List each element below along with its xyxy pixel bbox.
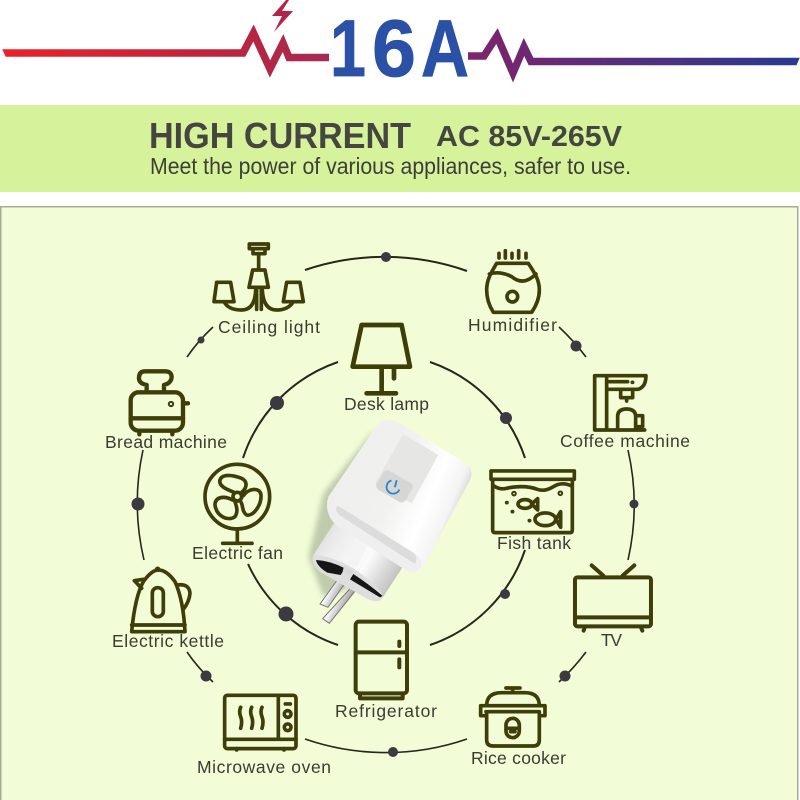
power line left <box>2 33 329 69</box>
label: electric kettle: Electric kettle <box>112 631 224 651</box>
inner ring dots <box>270 396 512 622</box>
label: fish tank: Fish tank <box>497 533 571 553</box>
icon: toaster <box>131 371 188 434</box>
smart plug <box>308 420 471 623</box>
plug earth clip <box>345 527 373 567</box>
icon: electric kettle <box>132 568 190 632</box>
banner subtitle: Meet the power of various appliances, safer to use. <box>150 153 631 179</box>
header: 16A power line <box>0 0 800 94</box>
icon: desk lamp <box>353 325 410 393</box>
voltage range: AC 85V-265V <box>436 121 623 153</box>
icon: rice cooker <box>481 688 545 746</box>
label: coffee machine: Coffee machine <box>560 431 690 451</box>
plug socket face <box>312 555 383 601</box>
icon: electric fan <box>205 464 270 543</box>
icon: coffee machine <box>595 376 646 430</box>
16A heading: 1 <box>330 4 366 94</box>
label: rice cooker: Rice cooker <box>471 748 566 768</box>
plug slots <box>316 560 383 597</box>
banner <box>0 105 800 192</box>
label: desk lamp: Desk lamp <box>344 394 429 414</box>
plug rim <box>327 500 422 573</box>
16A heading <box>330 4 469 94</box>
label: refrigerator: Refrigerator <box>335 701 437 721</box>
label: humidifier: Humidifier <box>468 315 557 335</box>
label: electric fan: Electric fan <box>192 543 283 563</box>
outer ring dots <box>132 252 638 757</box>
plug front cylinder <box>313 515 412 601</box>
plug body <box>328 420 471 573</box>
label: bread machine: Bread machine <box>105 432 227 452</box>
inner ring arcs <box>243 362 525 645</box>
label: ceiling light: Ceiling light <box>218 317 320 337</box>
outer ring arcs <box>137 257 634 753</box>
icon: refrigerator <box>356 622 407 698</box>
icon: tv <box>575 565 651 631</box>
16A heading: 6 <box>372 4 416 94</box>
lightning bolt icon <box>272 0 293 32</box>
label: tv: TV <box>601 630 622 650</box>
icon: fish tank <box>491 471 574 533</box>
icon: microwave oven <box>225 695 296 750</box>
panel: appliances <box>1 207 798 800</box>
plug pins <box>320 568 356 623</box>
icon: chandelier <box>214 244 303 310</box>
power symbol <box>385 478 402 495</box>
label: microwave oven: Microwave oven <box>197 757 331 777</box>
plug recess <box>375 434 438 503</box>
power line right <box>468 36 800 73</box>
plug shadow <box>308 428 375 597</box>
power button <box>375 469 414 504</box>
plug pins front <box>343 566 353 576</box>
banner heading: HIGH CURRENT <box>149 115 411 156</box>
icon: humidifier <box>487 251 539 312</box>
16A heading: A <box>421 4 469 94</box>
